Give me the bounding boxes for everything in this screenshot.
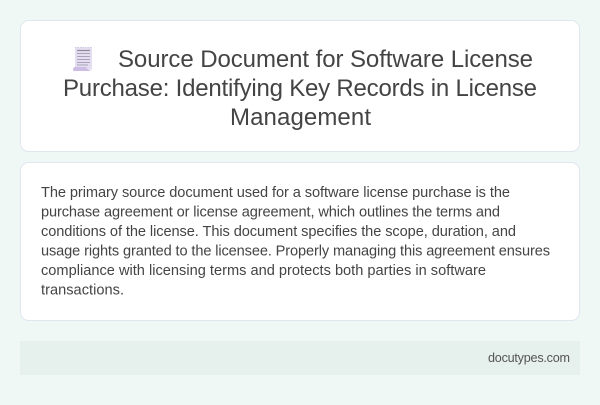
description text: The primary source document used for a software license purchase is the — [41, 185, 510, 201]
description text: usage rights granted to the licensee. Properly managing this agreement ensures — [41, 244, 550, 260]
panel: description card — [20, 162, 580, 320]
description text: purchase agreement or license agreement, which outlines the terms and — [41, 204, 500, 220]
description text: transactions. — [41, 282, 124, 298]
title: Purchase: Identifying Key Records in License — [63, 75, 537, 102]
description text — [41, 185, 550, 298]
title: Source Document for Software License — [118, 46, 533, 73]
footer source text: docutypes.com — [488, 351, 570, 365]
panel: title card — [20, 20, 580, 152]
title — [63, 46, 537, 131]
title: Management — [230, 104, 371, 131]
icon: document scroll — [73, 48, 92, 71]
description text: compliance with licensing terms and protects both parties in software — [41, 263, 486, 279]
description text: conditions of the license. This document specifies the scope, duration, and — [41, 224, 516, 240]
footer bar — [20, 341, 580, 375]
